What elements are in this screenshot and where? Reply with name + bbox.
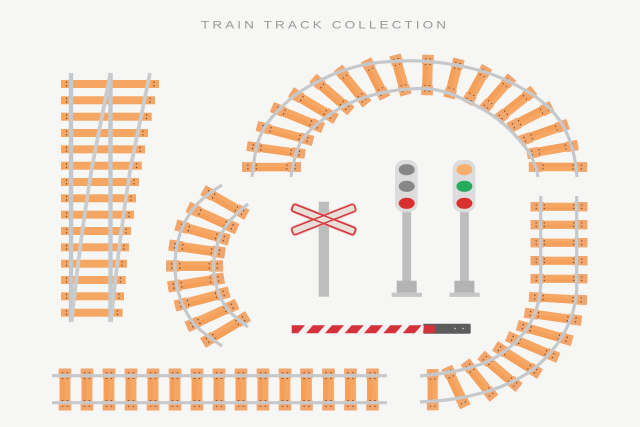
top curved track	[242, 53, 587, 177]
crossing cross arms	[289, 202, 358, 237]
traffic signal: orange green red	[449, 160, 480, 297]
switch track	[61, 73, 159, 322]
barrier gate	[292, 324, 471, 334]
crossing post	[319, 202, 329, 297]
bottom straight track	[52, 368, 387, 410]
left curved track	[166, 185, 251, 348]
traffic signal: red only	[392, 160, 422, 297]
right curved track	[420, 196, 588, 410]
title: TRAIN TRACK COLLECTION	[201, 19, 446, 31]
crossing sign	[289, 202, 358, 297]
